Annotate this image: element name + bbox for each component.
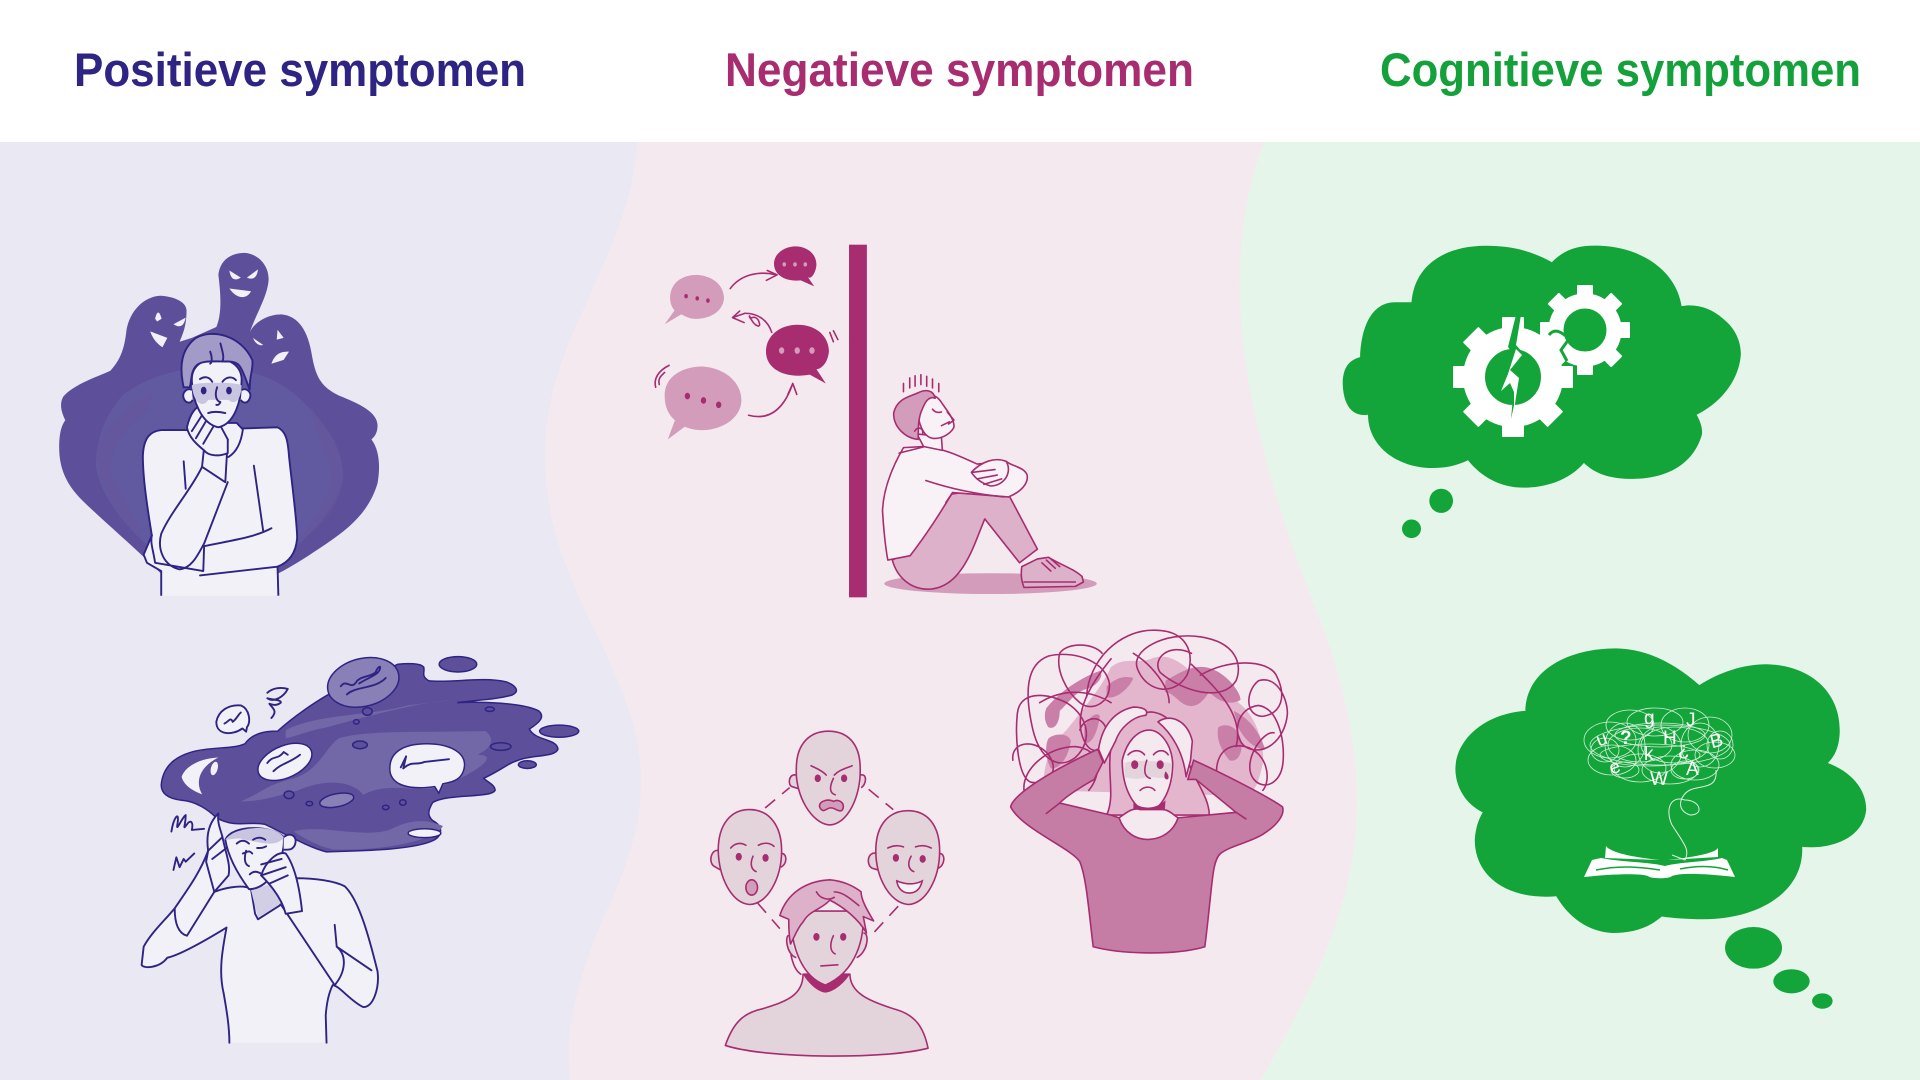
dark speech bubbles (774, 246, 816, 286)
shoes (1021, 557, 1083, 587)
illustration: man haunted by shadow ghosts (59, 253, 379, 596)
man arm lines (151, 461, 278, 575)
man body (143, 427, 297, 596)
shirt fold lines (175, 889, 371, 985)
illustration: overwhelmed woman with tangled thoughts (1011, 630, 1287, 953)
ground shadow (884, 573, 1097, 594)
body and sleeves (1011, 749, 1283, 953)
woman head (225, 828, 284, 889)
thought bubbles (325, 652, 401, 713)
wall (849, 245, 867, 597)
light speech bubbles (665, 275, 724, 324)
surprised face (711, 810, 786, 904)
cloud (1455, 648, 1866, 1009)
face (1122, 730, 1173, 811)
tangle letters: k (1644, 744, 1654, 765)
tangle colour blotches (1044, 657, 1263, 796)
word tangle (1584, 708, 1735, 784)
tangle letters: ? (1620, 728, 1632, 749)
legs (892, 491, 1037, 589)
panel: cognitieve symptomen background (1240, 142, 1920, 1080)
thoughts hair blob (161, 664, 558, 852)
tangle letters: u (1593, 728, 1610, 751)
angry face (789, 731, 865, 825)
hair (894, 391, 935, 439)
illustration: gossip speech bubbles (655, 245, 867, 597)
hands on head (1099, 707, 1147, 763)
heading: positieve symptomen: Positieve symptomen (74, 43, 526, 96)
thoughts lighter band (241, 700, 491, 850)
ghost shadows (59, 253, 379, 574)
tangle letters: J (1686, 710, 1696, 731)
illustration: man sitting by the wall (883, 375, 1097, 594)
small gear (1521, 266, 1649, 394)
tangle letters: e (1606, 756, 1623, 779)
open book (1584, 846, 1735, 878)
man bust (725, 880, 928, 1056)
loose speech bubble and spiral (216, 705, 249, 733)
stress marks (903, 375, 939, 392)
curved arrows (730, 270, 797, 417)
shirt outline (142, 851, 378, 1043)
hair (1107, 712, 1209, 815)
bubble dots (684, 294, 721, 408)
heading: negatieve symptomen: Negatieve symptomen (725, 43, 1194, 96)
tangle letters (1593, 708, 1726, 790)
tangle scribble (1013, 630, 1287, 796)
heading: cognitieve symptomen: Cognitieve symptomen (1380, 43, 1861, 96)
loose blobs (284, 657, 579, 810)
thought cloud: tangled letters above open book (1455, 648, 1866, 1009)
ghost faces (150, 269, 289, 364)
tangle letters: A (1686, 759, 1699, 780)
illustration: man with dark swirling thoughts (142, 652, 579, 1043)
tangle letters: H (1663, 728, 1677, 749)
scribbles (171, 815, 204, 870)
man neck and hand (204, 423, 243, 457)
torso and arms (883, 447, 1027, 560)
tangle letters: B (1708, 730, 1726, 753)
neck and head (917, 434, 942, 450)
hands (971, 460, 1008, 486)
hands on face (261, 853, 302, 914)
thread from book to tangle (1669, 770, 1716, 860)
tangle letters: g (1644, 708, 1655, 729)
thought cloud: broken gears (1343, 246, 1741, 538)
neck shadow (1133, 800, 1166, 812)
large broken gear (1428, 292, 1598, 462)
man hair (181, 334, 253, 390)
illustration: emotion faces around a man (711, 731, 944, 1056)
shirt fill (142, 840, 378, 1043)
cloud (1343, 246, 1741, 538)
tangle letters: W (1650, 769, 1668, 790)
panel: positieve symptomen background (0, 142, 641, 1080)
dashed links (758, 788, 901, 932)
tangle letters: ? (1678, 740, 1689, 761)
gear crack (1501, 315, 1523, 419)
man head (192, 358, 242, 427)
happy face (868, 811, 944, 904)
